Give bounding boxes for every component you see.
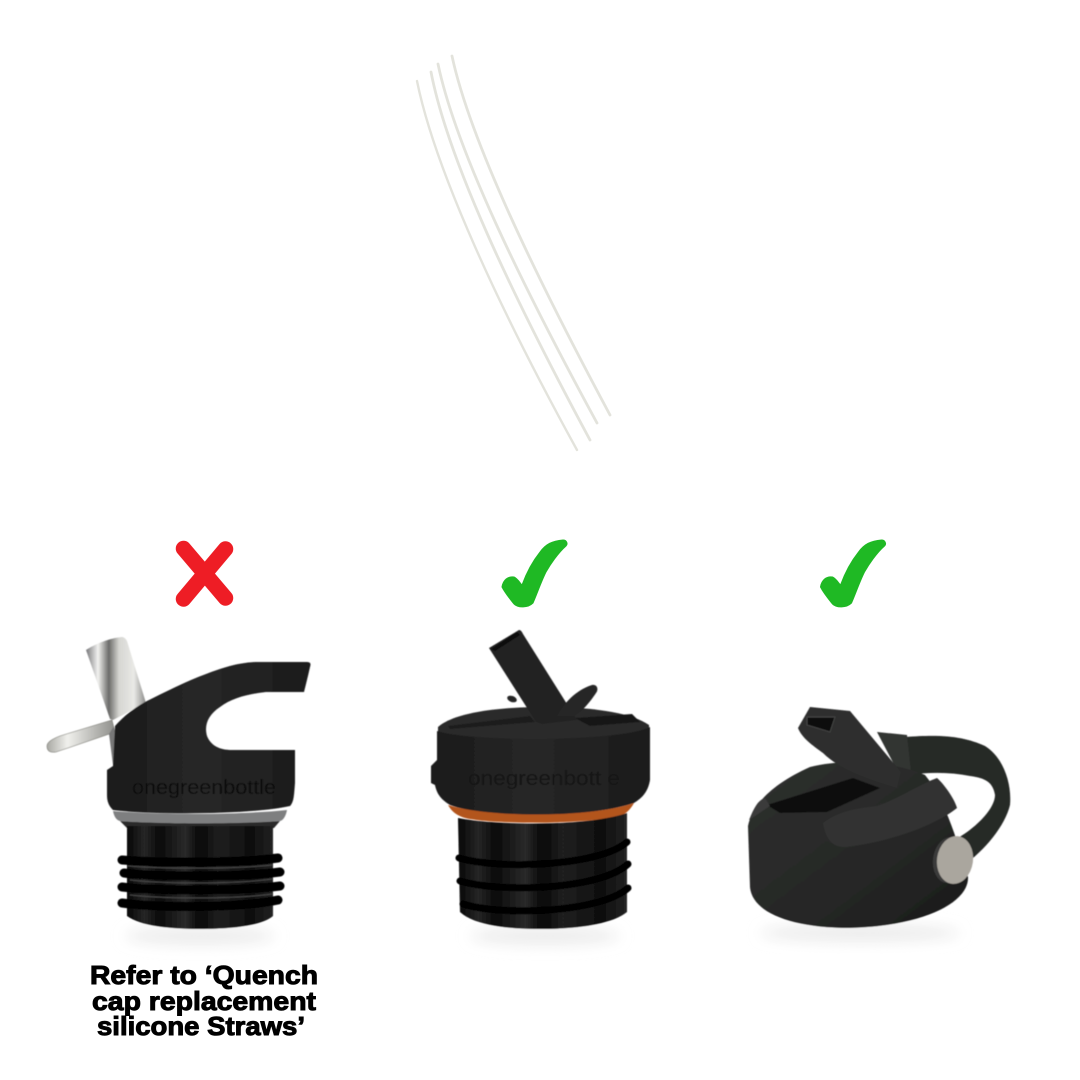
straw opening — [807, 717, 835, 732]
lid recess — [767, 778, 880, 813]
embossed brand text: onegreenbott e — [468, 768, 620, 790]
rear straw tab — [877, 732, 911, 772]
cap body — [748, 762, 968, 928]
product: quench cap with steel straw — [47, 637, 311, 945]
icon: green check, right cap — [820, 540, 886, 607]
embossed brand text: onegreenbottle — [132, 777, 276, 799]
product: wide mouth flip cap with strap — [748, 707, 1010, 942]
matte cap body — [431, 727, 650, 815]
icon: red cross — [184, 548, 226, 599]
black mouth straw — [489, 630, 577, 724]
straw 4 — [452, 56, 610, 415]
straw 2 — [431, 72, 590, 440]
icon: green check, middle cap — [502, 540, 567, 607]
orange seal ring — [448, 803, 634, 823]
straw 3 — [438, 64, 597, 423]
caption — [90, 960, 318, 1041]
steel straw tube — [86, 637, 146, 720]
lid ridge — [823, 778, 957, 847]
screw threads — [122, 858, 280, 906]
caption line 3: silicone Straws’ — [97, 1011, 305, 1041]
caption line 2: cap replacement — [92, 986, 316, 1016]
steel flange — [47, 720, 115, 752]
cap top surface — [438, 707, 649, 740]
screw threads — [459, 842, 628, 911]
caption line 1: Refer to ‘Quench — [90, 960, 318, 990]
carry strap — [905, 736, 1010, 866]
grey seal ring — [113, 810, 287, 823]
flip straw — [798, 707, 901, 788]
straw flange — [557, 685, 597, 716]
matte hood — [107, 662, 311, 813]
straw 1 — [417, 81, 577, 450]
straw flange nub — [506, 694, 518, 704]
gloss threaded neck — [127, 826, 273, 929]
gloss threaded neck — [458, 813, 627, 929]
silicone straws — [417, 56, 610, 450]
steel pin — [930, 835, 968, 885]
product: sport cap with black straw — [431, 630, 650, 945]
